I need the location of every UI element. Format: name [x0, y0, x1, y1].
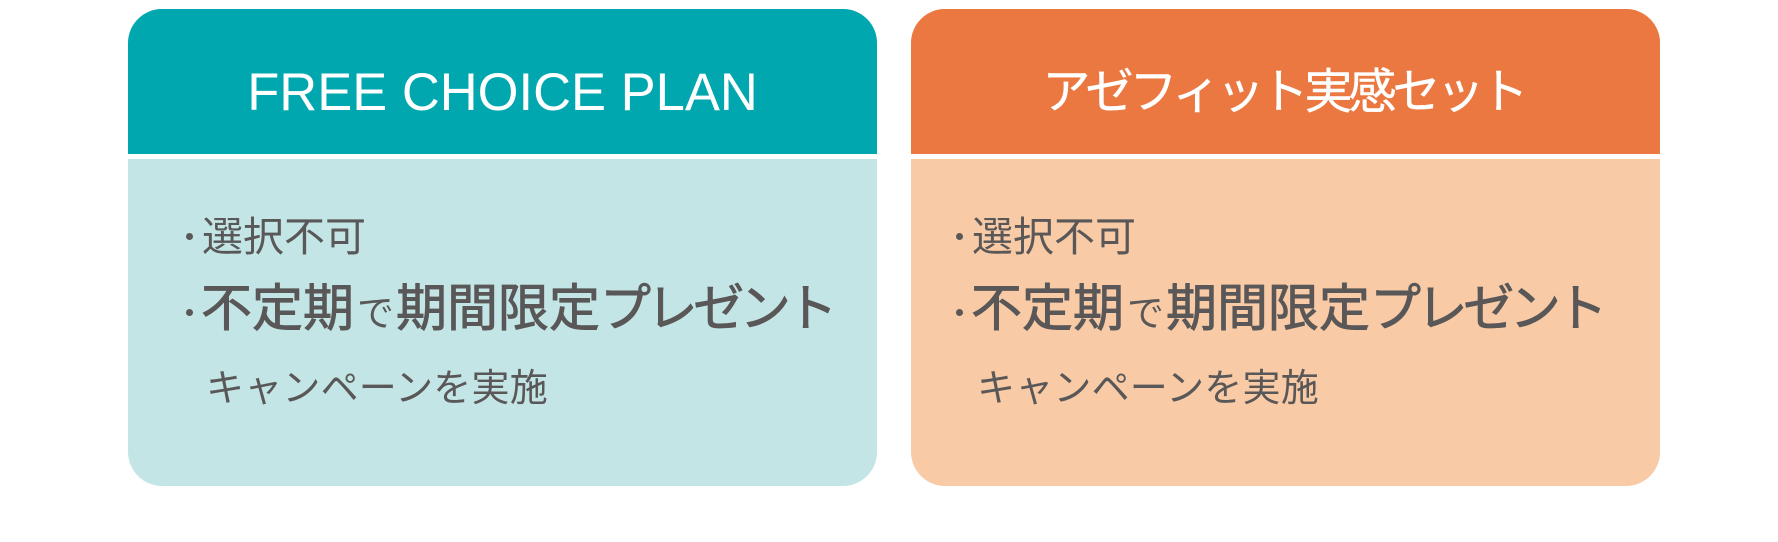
text: not selectable: 選択不可: [972, 214, 1136, 260]
bullet dot: [956, 233, 963, 240]
panel: FREE CHOICE PLAN: [128, 9, 877, 486]
heading: アゼフィット実感セット: [911, 9, 1660, 154]
heading: FREE CHOICE PLAN: FREE CHOICE PLAN: [247, 63, 758, 122]
text: irregular limited-time present: 不定期で期間限定プレゼント: [201, 280, 833, 337]
text: campaign note: キャンペーンを実施: [206, 368, 548, 410]
text: not selectable: 選択不可: [202, 214, 366, 260]
bullet dot: [956, 309, 963, 316]
text: campaign note: キャンペーンを実施: [977, 368, 1319, 410]
heading: アゼフィット実感セット: アゼフィット実感セット: [1042, 66, 1525, 119]
panel: アゼフィット実感セット: [911, 9, 1660, 486]
bullet dot: [186, 309, 193, 316]
heading: FREE CHOICE PLAN: [128, 9, 877, 154]
text: irregular limited-time present: 不定期で期間限定プレゼント: [971, 280, 1603, 337]
bullet dot: [186, 233, 193, 240]
